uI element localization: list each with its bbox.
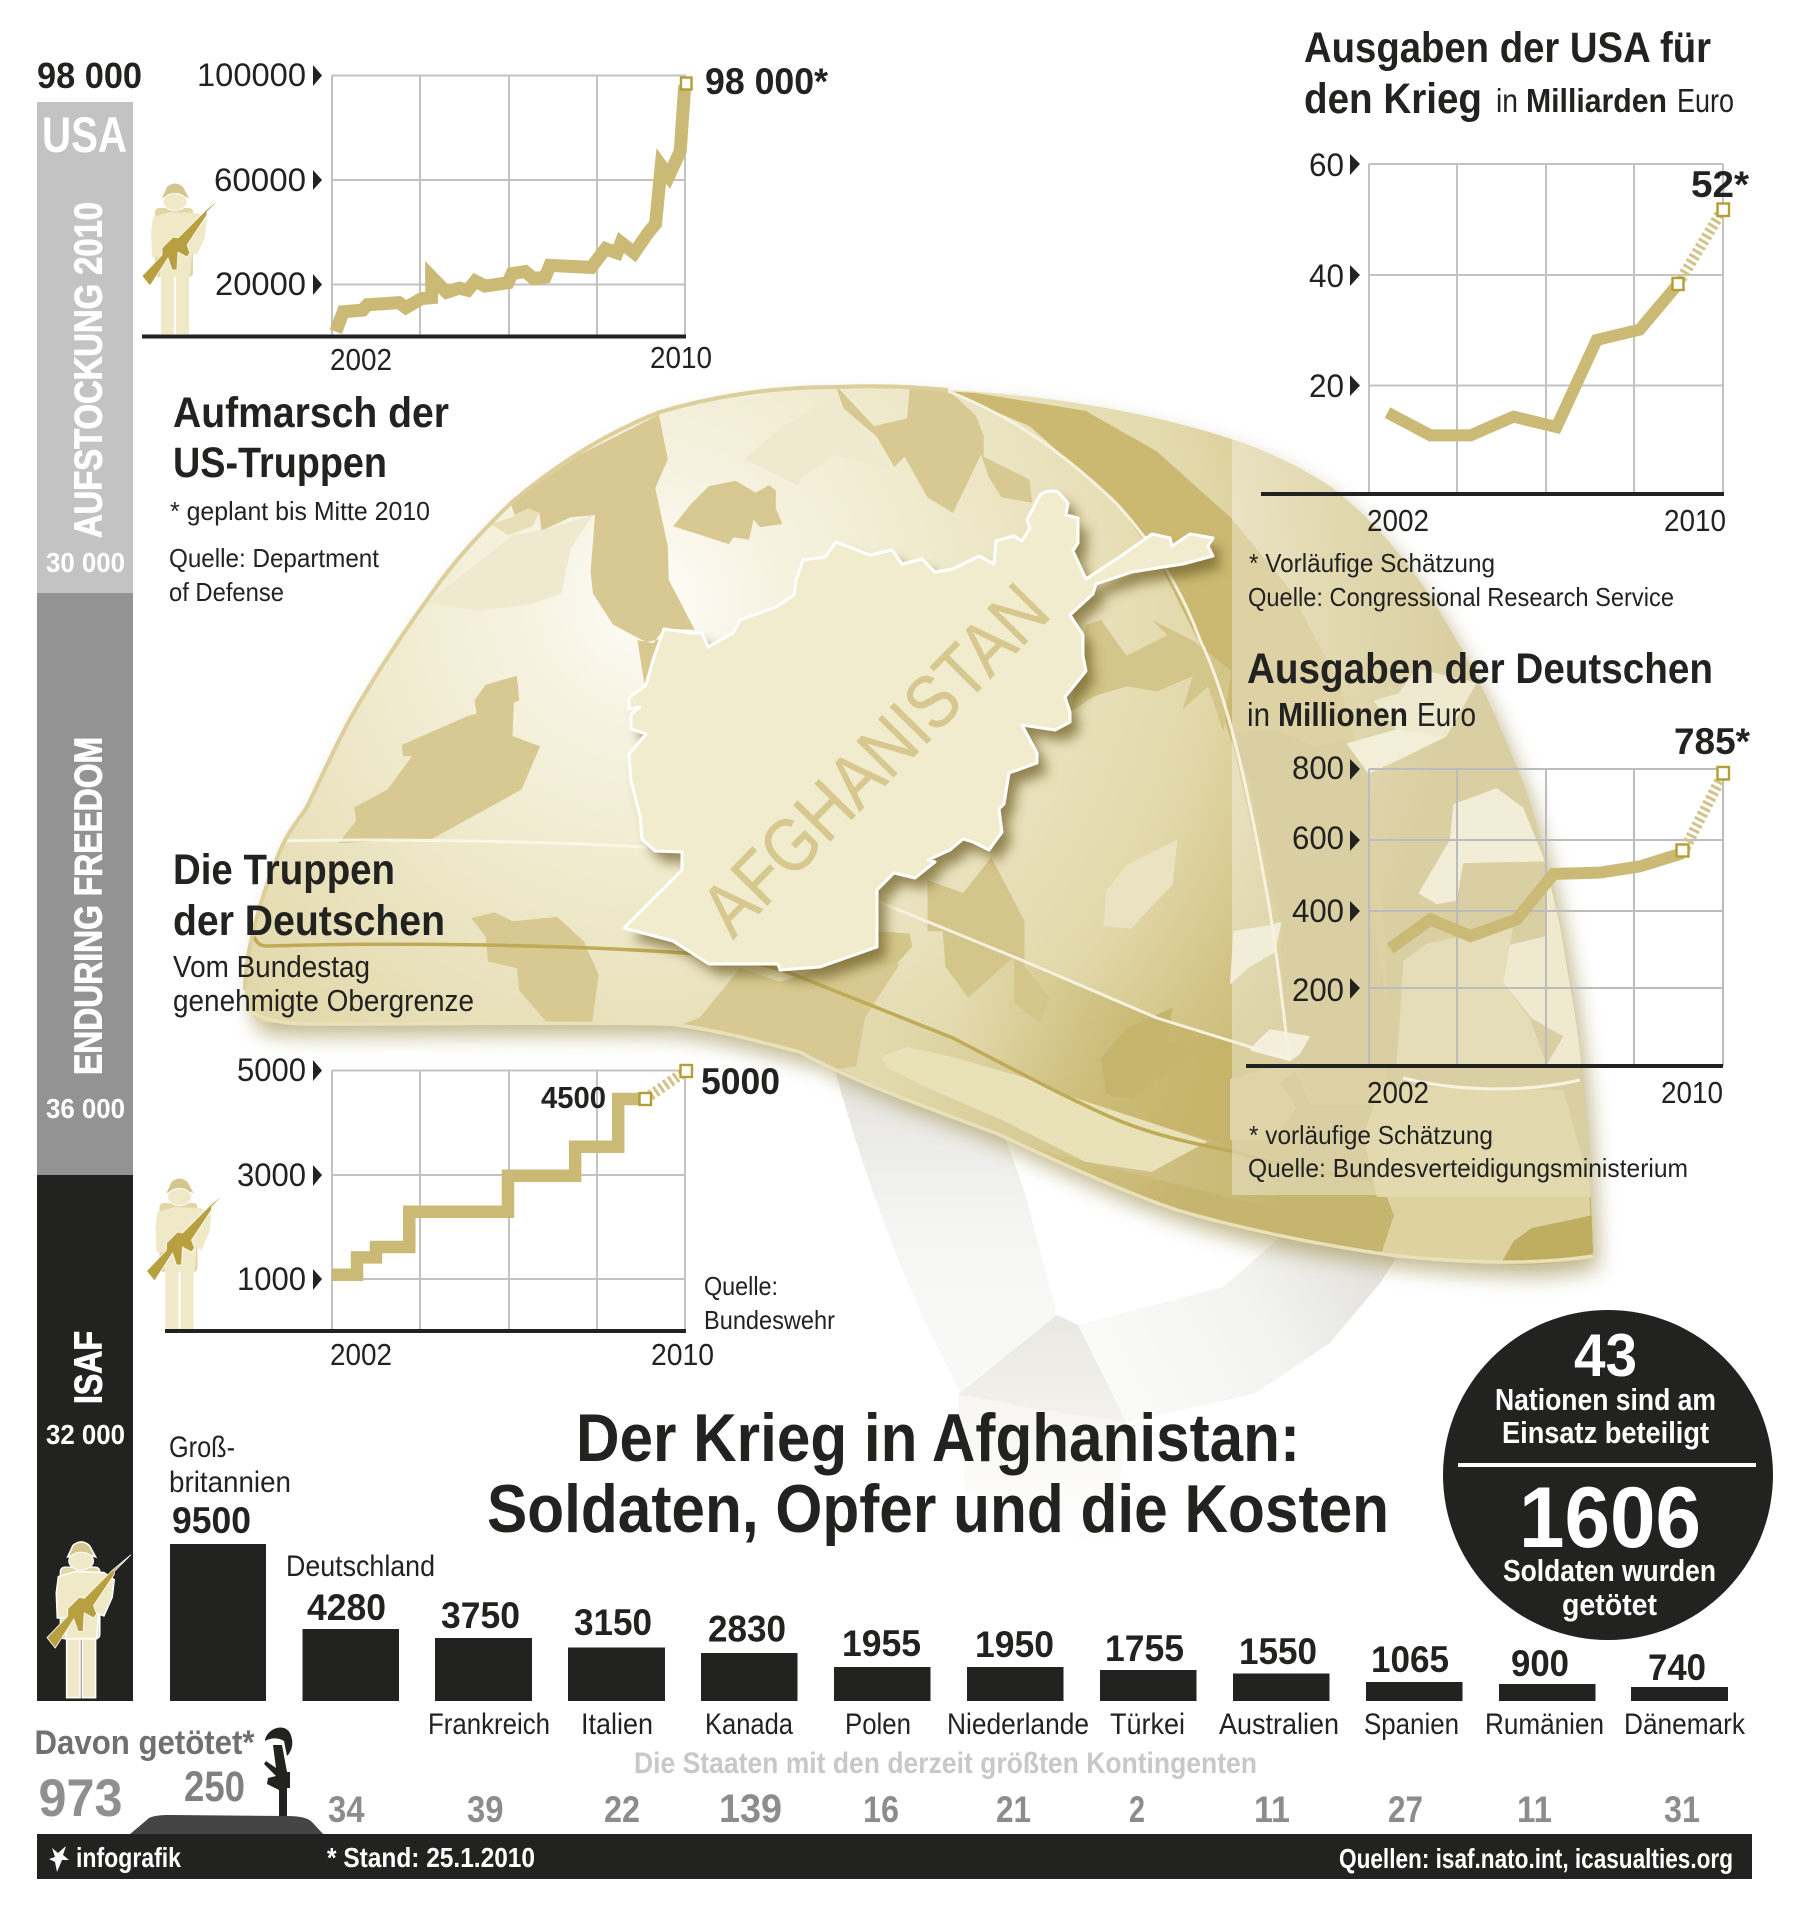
- heading: German spending: Ausgaben der Deutschen: [1247, 645, 1713, 693]
- bar chart: contingents: Rumänien: [1485, 1708, 1604, 1741]
- chart: US troops: 60000: [214, 162, 306, 198]
- helmet side band: [800, 385, 1387, 1105]
- sidebar: troop strength: AUFSTOCKUNG 2010: [68, 202, 110, 538]
- bar chart: contingents: Polen: [845, 1708, 911, 1741]
- chart: German troops: 5000: [701, 1061, 780, 1102]
- chart: German spending: [1246, 721, 1751, 1183]
- chart: German troops: 5000: [237, 1052, 306, 1088]
- helmet camouflage left: [338, 397, 900, 1071]
- icon: soldier Germany: [146, 1178, 228, 1329]
- heading: US troop deployment: [169, 389, 449, 607]
- chart: German troops: 2002: [330, 1337, 392, 1372]
- bar chart: contingents: 1950: [975, 1624, 1054, 1665]
- heading: US war spending: Milliarden: [1526, 82, 1667, 119]
- chart: US spending: [1248, 147, 1750, 612]
- map: Afghanistan: [624, 491, 1222, 981]
- chart: US troops: 100000: [197, 57, 306, 93]
- chart: US troops: [142, 57, 829, 377]
- heading: US war spending: Ausgaben der USA für: [1304, 24, 1711, 72]
- chart: US spending: * Vorläufige Schätzung: [1249, 548, 1495, 578]
- chart: US spending: 2010: [1664, 503, 1726, 538]
- chart: German spending: 2010: [1661, 1075, 1723, 1110]
- chart: German troops: 3000: [237, 1157, 306, 1193]
- callout: nations and deaths: 1606: [1519, 1470, 1701, 1566]
- helmet straps: [835, 1070, 1397, 1555]
- chart: German spending: 785*: [1674, 721, 1751, 762]
- title: [487, 1400, 1389, 1547]
- chart: US spending: 52*: [1691, 164, 1750, 205]
- icon: soldier ISAF: [47, 1542, 131, 1698]
- chart: US spending: Quelle: Congressional Research Service: [1248, 582, 1674, 612]
- heading: German troops: Vom Bundestag: [173, 949, 370, 984]
- casualties row: 250: [184, 1763, 245, 1811]
- chart: US spending: 20: [1309, 368, 1344, 404]
- chart: German troops: Bundeswehr: [704, 1305, 835, 1335]
- casualties row: 21: [996, 1789, 1031, 1830]
- chart: German troops: [146, 1052, 835, 1372]
- helmet highlight lines: [877, 391, 1289, 1059]
- sidebar: troop strength: [37, 55, 142, 1701]
- bar chart: contingents: 9500: [172, 1500, 251, 1541]
- chart: US troops: 2002: [330, 342, 392, 377]
- chart: US spending: 2002: [1367, 503, 1429, 538]
- casualties row: 16: [863, 1789, 899, 1830]
- translucent panel: [1232, 430, 1612, 1195]
- chart: German spending: 2002: [1367, 1075, 1429, 1110]
- heading: US war spending: den Krieg: [1304, 75, 1482, 123]
- casualties row: 27: [1388, 1789, 1423, 1830]
- footer bar: [37, 1834, 1752, 1879]
- heading: German spending: Millionen: [1278, 696, 1408, 733]
- heading: German troops: [173, 846, 474, 1018]
- bar chart: contingents: Australien: [1219, 1708, 1339, 1741]
- bar chart: contingents: Italien: [581, 1708, 653, 1741]
- callout: nations and deaths: [1443, 1310, 1773, 1640]
- casualties row: 31: [1664, 1789, 1700, 1830]
- heading: German troops: genehmigte Obergrenze: [173, 983, 474, 1018]
- heading: US troop deployment: US-Truppen: [173, 439, 387, 487]
- icon: star: [49, 1846, 69, 1872]
- casualties row: 22: [604, 1789, 640, 1830]
- footer bar: infografik: [76, 1842, 181, 1873]
- caption: largest contingents: Die Staaten mit den derzeit größten Kontingenten: [634, 1747, 1257, 1780]
- bar chart: contingents: Niederlande: [947, 1708, 1089, 1741]
- chart: German spending: 600: [1292, 820, 1344, 856]
- bar chart: contingents: 1065: [1371, 1639, 1449, 1680]
- heading: German spending: Euro: [1417, 696, 1476, 733]
- heading: German troops: Die Truppen: [173, 846, 395, 894]
- bar chart: contingents: 3750: [441, 1595, 520, 1636]
- heading: German spending: [1247, 645, 1713, 733]
- heading: US troop deployment: * geplant bis Mitte 2010: [170, 496, 430, 526]
- heading: US war spending: in: [1496, 82, 1518, 119]
- chart: German troops: 2010: [651, 1337, 714, 1372]
- casualties row: 11: [1517, 1789, 1552, 1830]
- casualties row: 11: [1254, 1789, 1290, 1830]
- chart: US spending: 40: [1309, 258, 1344, 294]
- chart: US troops: 2010: [650, 340, 712, 375]
- heading: US troop deployment: of Defense: [169, 577, 284, 607]
- helmet illustration: [245, 385, 1612, 1290]
- bar chart: contingents: Groß-: [169, 1431, 235, 1464]
- bar chart: contingents: 4280: [307, 1587, 386, 1628]
- bar chart: contingents: 3150: [574, 1602, 652, 1643]
- panel camouflage: [1230, 669, 1593, 1197]
- chart: German spending: * vorläufige Schätzung: [1249, 1120, 1493, 1150]
- title: Der Krieg in Afghanistan:: [576, 1400, 1300, 1476]
- bar chart: contingents: britannien: [169, 1466, 291, 1499]
- bar chart: contingents: 1755: [1105, 1628, 1184, 1669]
- chart: German spending: 800: [1292, 750, 1344, 786]
- title: Soldaten, Opfer und die Kosten: [487, 1471, 1389, 1547]
- bar chart: contingents: 1550: [1239, 1631, 1317, 1672]
- chart: German spending: 400: [1292, 893, 1344, 929]
- icon: soldier USA: [142, 184, 223, 334]
- heading: German spending: in: [1247, 696, 1270, 733]
- sidebar: troop strength: ISAF: [68, 1331, 110, 1404]
- bar chart: contingents: Frankreich: [428, 1708, 550, 1741]
- casualties row: 34: [328, 1789, 365, 1830]
- sidebar: troop strength: 32 000: [46, 1419, 125, 1450]
- callout: nations and deaths: 43: [1574, 1322, 1637, 1389]
- casualties row: [34, 1724, 1700, 1831]
- casualties row: 973: [38, 1769, 122, 1828]
- footer bar: * Stand: 25.1.2010: [327, 1842, 535, 1873]
- bar chart: contingents: 900: [1511, 1643, 1569, 1684]
- casualties row: 39: [467, 1789, 504, 1830]
- chart: German spending: 200: [1292, 972, 1344, 1008]
- map label: AFGHANISTAN: [685, 568, 1065, 951]
- bar chart: contingents: 2830: [708, 1608, 786, 1650]
- chart: US spending: 60: [1309, 147, 1344, 183]
- callout: nations and deaths: getötet: [1562, 1587, 1657, 1622]
- chart: German troops: 4500: [541, 1080, 606, 1115]
- heading: US war spending: [1304, 24, 1734, 123]
- heading: US troop deployment: Quelle: Department: [169, 543, 380, 573]
- heading: US troop deployment: Aufmarsch der: [173, 389, 449, 437]
- helmet brim light patches: [881, 1047, 1596, 1262]
- callout: nations and deaths: Nationen sind am: [1495, 1382, 1716, 1417]
- bar chart: contingents: Spanien: [1364, 1708, 1459, 1741]
- casualties row: 2: [1129, 1789, 1145, 1830]
- sidebar: troop strength: USA: [42, 107, 127, 163]
- heading: US war spending: Euro: [1677, 82, 1734, 119]
- bar chart: contingents: Türkei: [1110, 1708, 1185, 1741]
- bar chart: contingents: 740: [1648, 1647, 1706, 1688]
- casualties row: Davon getötet*: [34, 1724, 255, 1762]
- chart: German troops: Quelle:: [704, 1271, 778, 1301]
- bar chart: contingents: [169, 1431, 1746, 1741]
- helmet brim shading: [983, 959, 1263, 1140]
- heading: German troops: der Deutschen: [173, 897, 445, 945]
- bar chart: contingents: Kanada: [705, 1708, 793, 1741]
- bar chart: contingents: 1955: [842, 1623, 921, 1664]
- chart: US troops: 20000: [215, 266, 306, 302]
- chart: US troops: 98 000*: [705, 61, 829, 102]
- bar chart: contingents: Deutschland: [286, 1550, 435, 1583]
- sidebar: troop strength: ENDURING FREEDOM: [68, 737, 110, 1075]
- icon: grave with rifle and helmet: [129, 1728, 324, 1835]
- chart: German spending: Quelle: Bundesverteidigungsministerium: [1248, 1153, 1688, 1183]
- sidebar: troop strength: 30 000: [46, 547, 125, 578]
- chart: German troops: 1000: [237, 1261, 306, 1297]
- casualties row: 139: [719, 1787, 782, 1831]
- callout: nations and deaths: Soldaten wurden: [1503, 1553, 1716, 1588]
- callout: nations and deaths: Einsatz beteiligt: [1502, 1415, 1709, 1450]
- sidebar: troop strength: 36 000: [46, 1093, 125, 1124]
- total USA: 98 000: [37, 55, 142, 96]
- bar chart: contingents: Dänemark: [1624, 1708, 1746, 1741]
